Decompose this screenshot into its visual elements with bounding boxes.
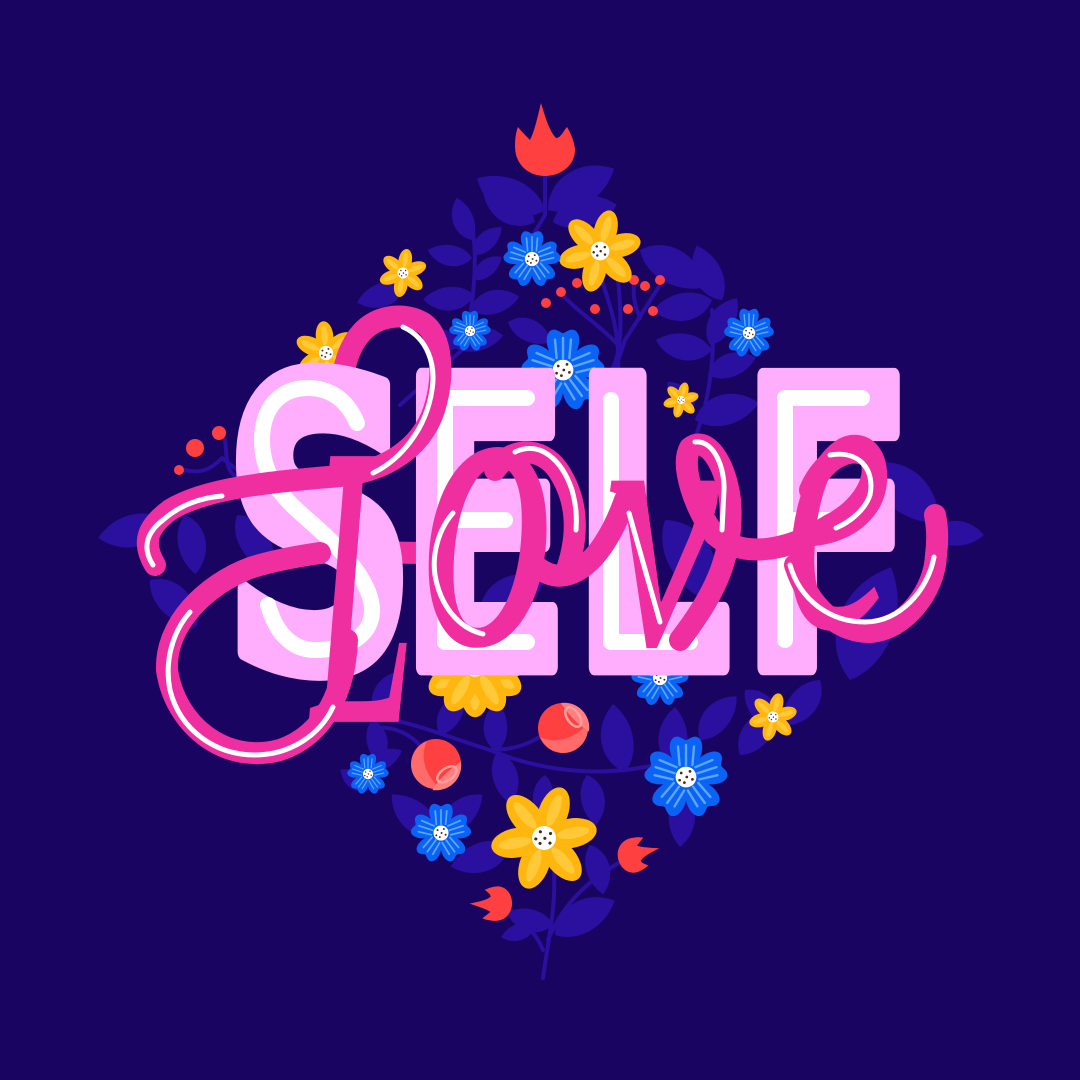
icon: red roses	[407, 699, 593, 794]
title: SELF block letters	[222, 296, 916, 762]
icon: blue flowers	[346, 231, 775, 864]
bottom leaves	[335, 664, 745, 947]
pink swashes connecting the script	[148, 323, 937, 753]
title: SELF block letters: F	[739, 298, 916, 762]
title: Love script word	[309, 270, 892, 807]
icon: red tulips	[468, 103, 663, 922]
top leaves	[354, 151, 762, 433]
title: Love script word: e	[785, 270, 892, 712]
title: SELF block letters: S	[222, 297, 417, 762]
title: Love script word: o	[422, 278, 553, 731]
icon: yellow flowers	[291, 200, 803, 906]
script swash passing behind the block letters	[320, 317, 430, 553]
side leaves	[95, 447, 984, 763]
red berries	[174, 275, 665, 475]
title: SELF block letters: E	[398, 297, 571, 761]
stems	[185, 176, 713, 978]
white inlines on SELF	[262, 388, 862, 650]
title: Love script word: v	[608, 333, 719, 719]
foliage: leaves and stems behind the lettering	[95, 151, 984, 978]
title: SELF block letters: L	[571, 296, 731, 762]
white highlights on the script	[147, 327, 934, 755]
title: Love script word: L	[309, 365, 414, 807]
